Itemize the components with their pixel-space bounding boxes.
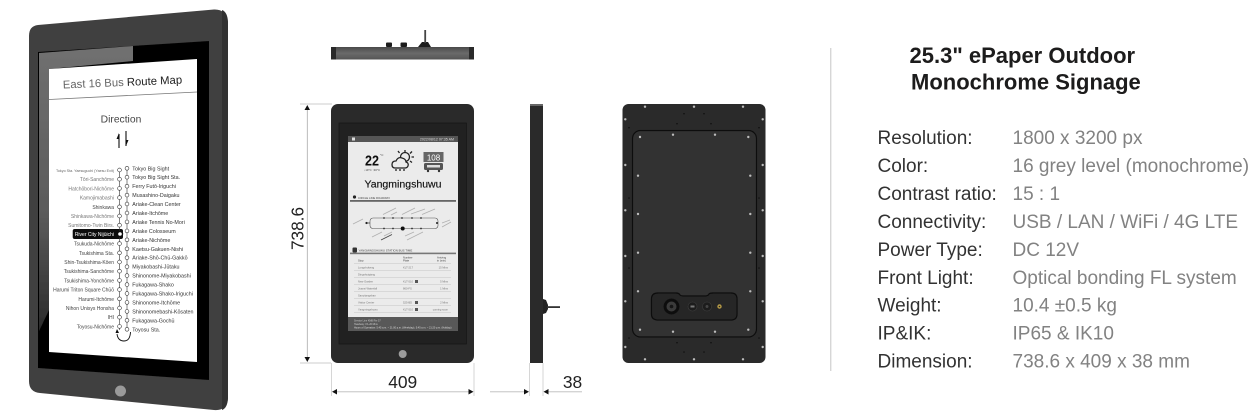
icon: weather cloud and sun [392,150,414,171]
right route stops: Fukagawa-Shako [132,283,174,289]
left route stops: Nihon Unisys Honsha [66,306,114,312]
front bezel [339,123,466,344]
back inner panel outline [632,130,756,337]
schedule table: KLT-217 [403,266,413,270]
route section heading [350,195,456,202]
left route stops: Tsukuda-Nichōme [74,242,114,248]
spec values [1012,128,1249,372]
temperature: ↓19°C ↑30°C [364,168,380,172]
schedule table: Sanyitangshan [358,294,376,298]
left route stops [53,169,114,330]
panel: perspective view of device [29,9,228,410]
schedule table: 5 Mins [440,280,449,284]
right route stops: Ariake Tennis No-Mori [132,220,185,226]
right route stops: Shinonome-Miyakobashi [132,274,191,280]
spec labels: Connectivity: [878,212,986,233]
screen header bar [348,136,458,142]
spec labels: Contrast ratio: [878,184,997,205]
product title: 25.3" ePaper Outdoor [910,43,1136,68]
current stop highlight [73,229,123,239]
panel: back view of device [622,104,766,363]
side connector and cable [543,299,560,314]
spec values: 738.6 x 409 x 38 mm [1012,352,1190,372]
schedule section heading: YANGMINGSHUWU STATION BUS TIME [358,248,412,252]
dimension: width 409: 409 [388,372,417,392]
schedule table: Visitor Center [358,300,374,304]
device right edge [222,10,228,410]
left route stops: Harumi Triton Square Chūō [53,288,114,294]
back body [622,104,766,363]
right route stops: Miyakobashi-Jūtaku [132,265,180,271]
icon: bus number 108 [424,152,444,172]
product title: Monochrome Signage [911,70,1141,94]
temperature: 22 [365,153,379,170]
right route stops: Ariake Colosseum [132,229,176,235]
icon: bus number 108: 108 [427,154,441,162]
right route stops: Fukagawa-Shako-Iriguchi [132,292,193,298]
spec values: Optical bonding FL system [1012,268,1237,289]
schedule section heading [350,248,456,254]
spec values: 10.4 ±0.5 kg [1012,296,1117,316]
schedule table [354,256,451,312]
schedule table: KLT-510 [403,280,413,284]
right route stops: Ariake-Shō-Chū-Gakkō [132,256,188,262]
schedule table: Longzhukeng [358,266,375,270]
panel: specifications [878,43,1249,372]
spec labels: Power Type: [878,240,983,261]
top view connectors [386,30,431,47]
left route stops: IHI [108,315,114,321]
panel: front view of device [331,104,474,363]
left route stops: Shin-Tsukishima-Kōen [64,260,114,266]
side body [530,104,543,363]
screen footer: Hours of Operation: 5:45 a.m. ~ 21:00 p.m. (Weekday), 5:45 a.m. ~ 21:20 p.m. (Holiday) [354,327,452,330]
right route stops: Tokyo Big Sight Sta. [132,175,180,181]
product title [910,43,1141,94]
right route stops: Ariake-Clean Center [132,202,181,208]
schedule table: Plate [403,258,410,262]
schedule table: Number [403,256,413,260]
right route stops: Fukagawa-Gochū [132,318,175,324]
top view end caps [331,47,336,60]
schedule table: New Garden [358,280,374,284]
spec labels: Resolution: [878,128,973,149]
left route stops: Kamojimabashi [80,196,114,202]
screen title: East 16 Bus Route Map [63,75,182,91]
white screen [49,59,197,362]
spec values: DC 12V [1012,240,1079,261]
left route stops: Tsukishima Sta. [79,251,114,257]
route line graphic [116,166,130,341]
right route stops: Shinonomebashi-Kōsaten [132,309,194,315]
dimension: width 409 [332,363,474,396]
device body [29,9,228,410]
screen footer [348,317,458,331]
route map diagram [353,208,451,240]
spec values: 15 : 1 [1012,184,1060,205]
back screws [624,106,764,360]
back port recess [652,293,737,320]
left route stops: Tsukishima-Yonchōme [64,278,114,284]
dimension: height 738.6: 738.6 [288,207,308,250]
spec labels: Weight: [878,296,942,316]
dimension: depth 38 [490,363,582,396]
left route stops: Shinkawa-Nichōme [71,214,114,220]
current stop highlight: River City Nijūichi [75,232,114,238]
direction label: Direction [101,114,142,126]
front screen [348,136,458,331]
left route stops: Hatchōbori-Nichōme [68,186,114,192]
screen header bar: 2022/08/12 07:35 AM [420,138,454,142]
left route stops: Toyosu-Nichōme [77,324,114,330]
schedule table: 860-FS [403,286,412,290]
spec labels: IP&IK: [878,324,931,344]
title underline [49,92,197,100]
left route stops: Tōri-Sanchōme [80,177,114,183]
schedule table: 15 Mins [439,266,449,270]
right route stops: Kaetsu-Gakuen-Nishi [132,247,183,253]
route section heading: CIRCLE LINE ROADWAY [358,196,390,200]
spec labels [878,128,997,372]
left route stops: Shinkawa [92,205,114,211]
schedule table: coming soon [433,308,448,312]
direction arrows [116,131,128,148]
spec values: 1800 x 3200 px [1012,128,1143,149]
side top highlight [530,104,543,106]
schedule table: KLT-510 [403,308,413,312]
right route stops: Ferry Futō-Iriguchi [132,184,176,190]
right route stops: Tokyo Big Sight [132,166,170,172]
left route stops: Tokyo Sta. Yaesuguchi (Yaesu Exit) [56,169,114,173]
screen footer: Headway: 15~20 Mins [354,323,379,326]
spec values: USB / LAN / WiFi / 4G LTE [1012,212,1238,233]
spec values: IP65 & IK10 [1012,324,1114,344]
black bezel [38,41,209,380]
schedule table: Juansi Waterfall [358,286,377,290]
schedule table: 525-BD [403,300,412,304]
top view body [331,47,474,60]
screen footer: Service Line KMB Rte 57 [354,320,381,322]
schedule table: Yangmingshuwu [358,308,378,312]
dimension: height 738.6 [288,104,332,363]
right route stops: Ariake-Nichōme [132,238,170,244]
schedule table: Arriving [437,256,447,260]
panel: top view of device [331,30,474,60]
right route stops: Ariake-Itchōme [132,211,168,217]
front body [331,104,474,363]
vertical divider [830,48,832,371]
panel: side view of device [530,104,560,363]
back small dark holes [628,113,760,353]
left route stops: Tsukishima-Sanchōme [64,269,114,275]
left route stops: Harumi-Itchōme [78,297,114,303]
right route stops: Shinonome-Itchōme [132,300,180,306]
left route stops: Sumitomo-Twin Birs. [68,223,114,229]
schedule table: 2 Mins [440,300,449,304]
right route stops [132,166,194,333]
spec values: 16 grey level (monochrome) [1012,156,1249,177]
right route stops: Toyosu Sta. [132,327,160,333]
stop name: Yangmingshuwu [364,179,442,191]
spec labels: Color: [878,156,928,177]
bezel gloss [39,46,133,331]
dimension: depth 38: 38 [563,372,582,392]
schedule table: Stop [358,258,364,262]
home button [115,386,126,396]
schedule table: 1 Mins [440,286,449,290]
right route stops: Musashino-Daigaku [132,193,180,199]
schedule table: Dingshuiqiang [358,272,376,276]
spec labels: Dimension: [878,352,973,372]
temperature: °C [380,153,384,157]
schedule table: in (min) [437,258,446,262]
spec labels: Front Light: [878,268,974,289]
front home button [399,350,407,358]
